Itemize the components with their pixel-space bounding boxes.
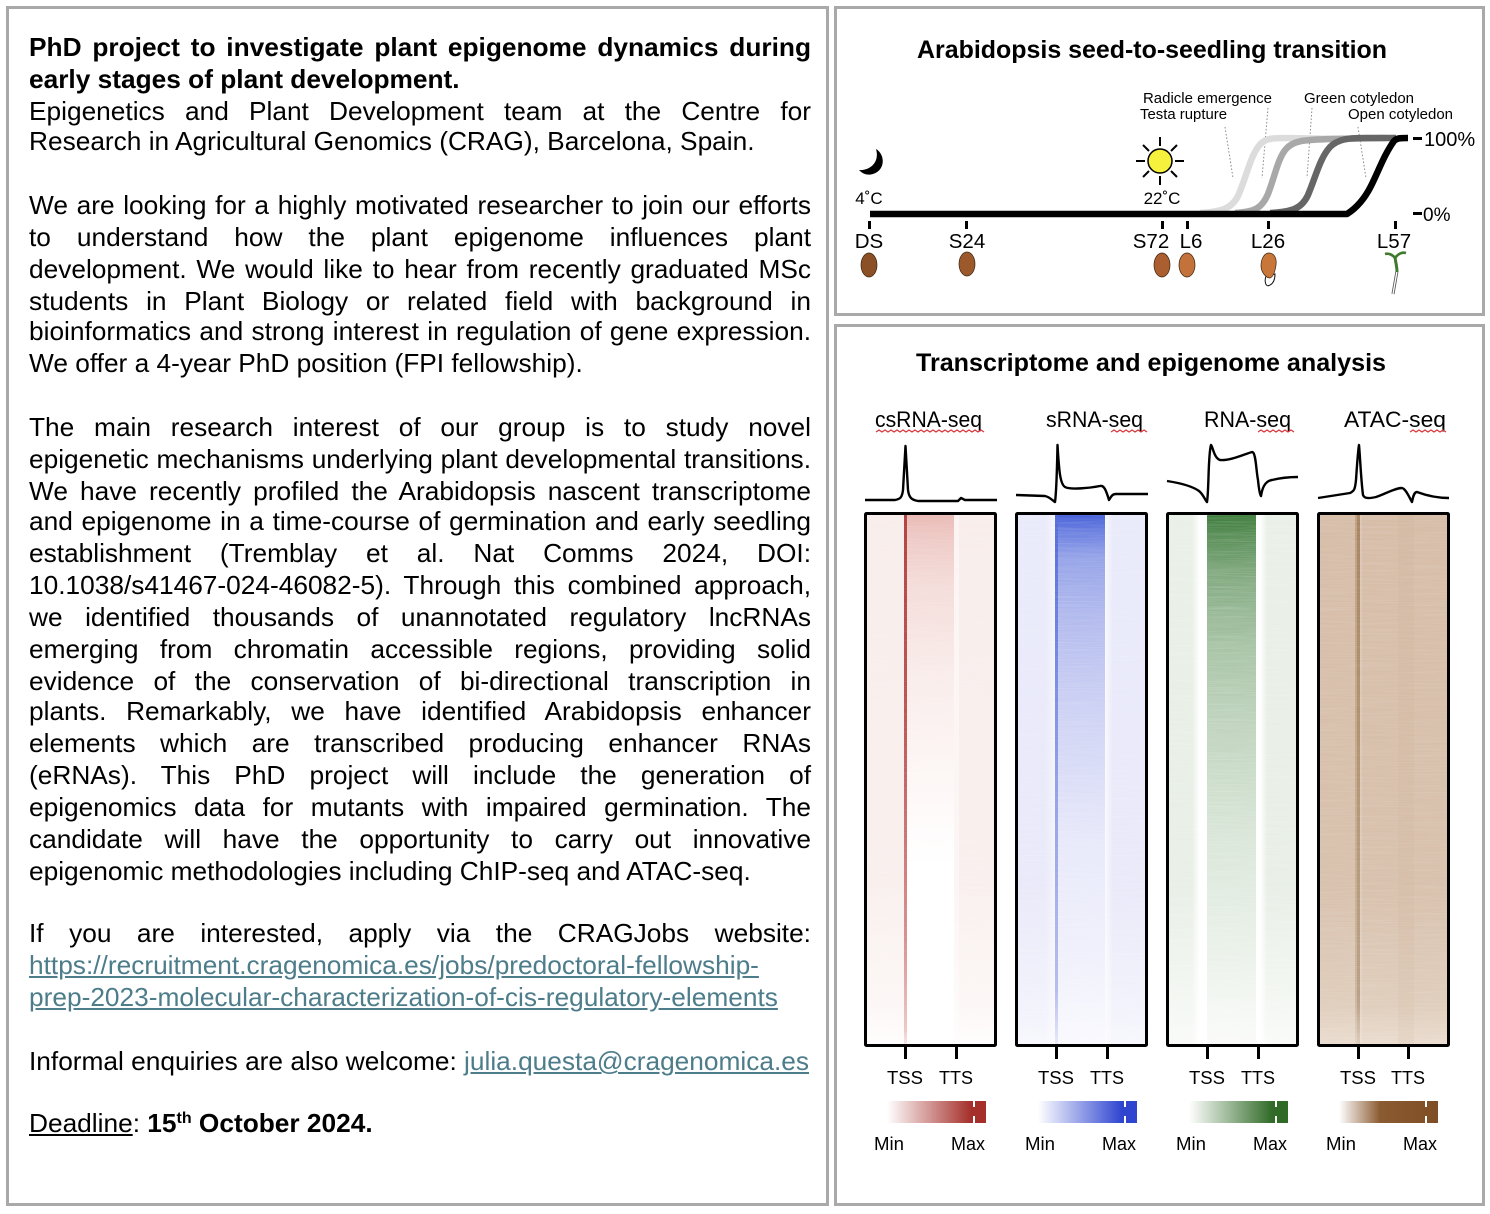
temperatures [855,189,1180,208]
metagene profile [1318,445,1449,502]
gene position ticks: TSS [1340,1068,1376,1088]
assay title: ATAC-seq [1344,407,1446,432]
temperatures: 4˚C [855,189,883,208]
time point ticks and labels: L57 [1377,230,1411,253]
stage labels on curves: Radicle emergence [1143,90,1272,107]
axis labels [1413,129,1475,226]
column: ATAC-seq [1318,407,1449,1154]
colour scale [1176,1101,1288,1154]
stage labels on curves: Open cotyledon [1348,106,1453,123]
temperatures: 22˚C [1144,189,1180,208]
colour scale: Max [951,1134,985,1154]
gene position ticks [1340,1047,1425,1088]
text block: research interest: emerging from chromatin accessible regions, providing solid [29,634,811,664]
heading: transcriptome and epigenome: Transcriptome and epigenome analysis [916,349,1386,377]
time point ticks and labels [855,221,1411,253]
text block: research interest: establishment (Tremblay et al. Nat Comms 2024, DOI: [29,538,811,568]
dotted leader lines [1225,108,1366,178]
text block: position description: bioinformatics and strong interest in regulation of gene expression. [29,316,811,346]
icon: seedling [1385,253,1406,294]
assay title: sRNA-seq [1046,407,1143,432]
gene position ticks [1189,1047,1275,1088]
text block: research interest: The main research interest of our group is to study novel [29,412,811,442]
gene position ticks: TTS [1090,1068,1124,1088]
panel: transcriptome and epigenome analysis [834,324,1485,1206]
column: csRNA-seq [865,407,997,1154]
stage labels on curves [1140,90,1453,123]
text block: position description: to understand how the plant epigenome influences plant [29,222,811,252]
gene position ticks [1038,1047,1124,1088]
text block: how to apply: https://recruitment.cragenomica.es/jobs/predoctoral-fellowship- [29,950,759,980]
text block: research interest: plants. Remarkably, we have identified Arabidopsis enhancer [29,696,811,726]
text block: research interest: epigenomics data for mutants with impaired germination. The [29,792,811,822]
gene position ticks: TTS [1241,1068,1275,1088]
germination curves [870,138,1408,214]
time point ticks and labels: L26 [1251,230,1285,253]
gene position ticks [887,1047,973,1088]
text block: position description [29,190,811,378]
text block: research interest: 10.1038/s41467-024-46082-5). Through this combined approach, [29,570,811,600]
text block: project heading: PhD project to investigate plant epigenome dynamics during [29,32,811,62]
text block: research interest: epigenomic methodologies including ChIP-seq and ATAC-seq. [29,856,751,886]
colour scale: Min [1326,1134,1356,1154]
text block: research interest: (eRNAs). This PhD project will include the generation of [29,760,811,790]
heatmap [1016,514,1146,1046]
column: sRNA-seq [1016,407,1148,1154]
text block: how to apply: prep-2023-molecular-characterization-of-cis-regulatory-elements [29,982,778,1012]
panel: job description [6,6,829,1206]
assay title: csRNA-seq [875,407,982,432]
colour scale: Max [1102,1134,1136,1154]
text block: position description: students in Plant Biology or related field with background in [29,286,811,316]
gene position ticks: TTS [939,1068,973,1088]
heading: seed-to-seedling: Arabidopsis seed-to-seedling transition [917,36,1387,64]
metagene profile [1167,445,1298,502]
text block: research interest [29,412,812,886]
panel: seed-to-seedling transition [834,6,1485,316]
metagene profile [1016,445,1148,502]
colour scale [874,1101,986,1154]
gene position ticks: TSS [887,1068,923,1088]
colour scale: Min [874,1134,904,1154]
column: RNA-seq [1167,407,1298,1154]
text block: position description: development. We would like to hear from recently graduated MSc [29,254,811,284]
time point ticks and labels: DS [855,230,883,253]
colour scale: Min [1025,1134,1055,1154]
chart: germination time course [855,90,1475,294]
axis labels: 0% [1423,205,1451,226]
text block: research interest: candidate will have the opportunity to carry out innovative [29,824,811,854]
stage labels on curves: Green cotyledon [1304,90,1414,107]
gene position ticks: TSS [1189,1068,1225,1088]
colour scale [1025,1101,1137,1154]
text block: position description: We offer a 4-year PhD position (FPI fellowship). [29,348,583,378]
text block: team and location: Epigenetics and Plant Development team at the Centre for [29,96,811,126]
text block: research interest: epigenetic mechanisms underlying plant developmental transitions. [29,444,811,474]
colour scale: Min [1176,1134,1206,1154]
text block: informal enquiries: Informal enquiries are also welcome: julia.questa@cragenomica.es [29,1046,809,1076]
heatmap [1318,514,1448,1046]
text block: research interest: we identified thousands of unannotated regulatory lncRNAs [29,602,811,632]
time point ticks and labels: L6 [1180,230,1202,253]
text block: research interest: and epigenome in a time-course of germination and early seedling [29,506,811,536]
icon: moon [859,149,883,175]
text block: team and location [29,96,811,156]
gene position ticks: TTS [1391,1068,1425,1088]
text block: project heading [29,32,811,94]
text block: team and location: Research in Agricultural Genomics (CRAG), Barcelona, Spain. [29,126,755,156]
heatmap [866,514,996,1046]
time point ticks and labels: S24 [949,230,985,253]
assay title: RNA-seq [1204,407,1291,432]
text block: research interest: We have recently profiled the Arabidopsis nascent transcriptome [29,476,811,506]
text block: project heading: early stages of plant development. [29,64,460,94]
axis labels: 100% [1424,129,1475,151]
colour scale [1326,1101,1438,1154]
icons: seeds [861,252,1276,286]
text block: how to apply [29,918,811,1012]
text block: research interest: evidence of the conservation of bi-directional transcription in [29,666,811,696]
text block: deadline: Deadline: 15th October 2024. [29,1108,373,1138]
text block: position description: We are looking for a highly motivated researcher to join our efforts [29,190,811,220]
text block: research interest: elements which are transcribed producing enhancer RNAs [29,728,811,758]
colour scale: Max [1403,1134,1437,1154]
gene position ticks: TSS [1038,1068,1074,1088]
colour scale: Max [1253,1134,1287,1154]
text block: how to apply: If you are interested, apply via the CRAGJobs website: [29,918,811,948]
heatmap [1168,514,1298,1046]
icon: sun [1136,137,1184,185]
metagene profile [865,446,997,501]
stage labels on curves: Testa rupture [1140,106,1227,123]
time point ticks and labels: S72 [1133,230,1169,253]
